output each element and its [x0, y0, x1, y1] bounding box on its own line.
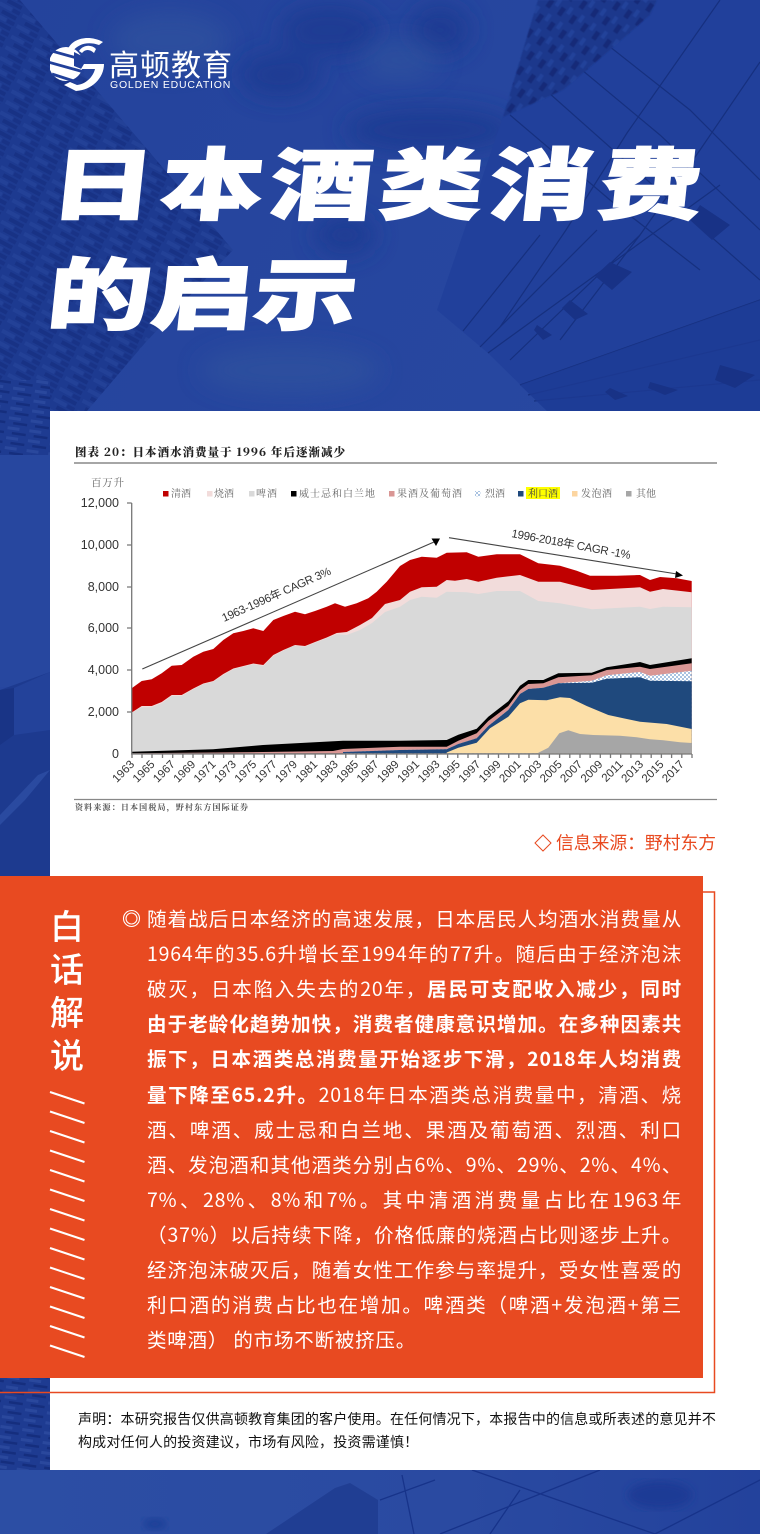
y axis labels: 10,000 — [81, 538, 119, 552]
x axis year labels: 1993 — [416, 759, 443, 785]
body text: 由于老龄化趋势加快，消费者健康意识增加。在多种因素共 — [147, 1008, 682, 1037]
body text: 1964年的35.6升增长至1994年的77升。随后由于经济泡沫 — [147, 938, 682, 967]
x axis year labels: 1963 — [111, 759, 137, 785]
body text: 酒、发泡酒和其他酒类分别占6%、9%、29%、2%、4%、 — [147, 1149, 682, 1178]
left building — [0, 0, 233, 455]
lower right darker facade — [520, 300, 760, 411]
x axis year labels: 1969 — [172, 759, 198, 785]
legend — [163, 485, 656, 500]
x axis year labels: 2007 — [558, 759, 585, 785]
x axis year labels: 1989 — [375, 759, 402, 785]
right building facade — [437, 0, 760, 411]
legend: 烈酒 — [485, 485, 505, 500]
x axis year labels: 1997 — [457, 759, 483, 785]
icon: globe logo mark — [50, 38, 104, 91]
x axis year labels: 1981 — [294, 759, 320, 785]
chart heading: 图表 20：日本酒水消费量于 1996 年后逐渐减少 — [75, 444, 346, 460]
legend: 利口酒 — [528, 485, 558, 500]
body text: 量下降至65.2升。2018年日本酒类总消费量中，清酒、烧 — [147, 1078, 682, 1108]
y axis labels: 6,000 — [88, 621, 119, 635]
x axis year labels: 1973 — [212, 759, 239, 785]
body text: 破灭，日本陷入失去的20年，居民可支配收入减少，同时 — [147, 973, 682, 1002]
logo: Golden Education — [50, 38, 233, 91]
title — [43, 124, 715, 346]
windows — [534, 205, 755, 400]
stacked areas — [132, 552, 692, 753]
x axis year labels: 1965 — [131, 759, 158, 785]
legend: 果酒及葡萄酒 — [397, 485, 462, 500]
y axis labels — [81, 496, 119, 761]
x axis year labels: 1967 — [151, 759, 178, 785]
legend: 威士忌和白兰地 — [299, 485, 375, 500]
x axis year labels: 2003 — [518, 759, 544, 785]
brand name Chinese: 高顿教育 — [109, 41, 233, 85]
body text: （37%）以后持续下降，价格低廉的烧酒占比则逐步上升。 — [147, 1219, 682, 1248]
x axis year labels: 1979 — [273, 759, 300, 785]
x axis year labels: 1983 — [314, 759, 341, 785]
body text: 利口酒的消费占比也在增加。啤酒类（啤酒+发泡酒+第三 — [147, 1289, 682, 1318]
x axis year labels: 1987 — [355, 759, 381, 785]
lower left building strip — [0, 1378, 50, 1470]
x axis year labels: 2015 — [640, 759, 667, 785]
x axis year labels — [111, 759, 687, 785]
disclaimer: 构成对任何人的投资建议，市场有风险，投资需谨慎！ — [78, 1432, 418, 1452]
label: decline CAGR: 1996-2018年 CAGR -1% — [510, 526, 632, 562]
body text: 酒、啤酒、威士忌和白兰地、果酒及葡萄酒、烈酒、利口 — [147, 1114, 682, 1143]
disclaimer: 声明：本研究报告仅供高顿教育集团的客户使用。在任何情况下，本报告中的信息或所表述的意见并不 — [78, 1409, 716, 1429]
vertical heading — [50, 900, 84, 1078]
panel: white card — [50, 411, 760, 1470]
x axis year labels: 2005 — [538, 759, 565, 785]
decorative slashes — [50, 1091, 85, 1358]
legend: 其他 — [636, 485, 656, 500]
title: 的启示 — [43, 234, 364, 346]
body text: 随着战后日本经济的高速发展，日本居民人均酒水消费量从 — [147, 903, 682, 932]
y axis labels: 8,000 — [88, 580, 119, 594]
y axis labels: 2,000 — [88, 705, 119, 719]
x axis year labels: 1991 — [396, 759, 422, 785]
chart: Japanese alcohol consumption stacked area — [74, 444, 717, 813]
body text: 7%、28%、8%和7%。其中清酒消费量占比在1963年 — [147, 1184, 682, 1213]
source credit — [534, 829, 716, 855]
vertical heading: 白 — [50, 900, 84, 949]
x axis year labels: 1975 — [233, 759, 259, 785]
decorative orange outline — [0, 891, 716, 1394]
body text: 类啤酒） 的市场不断被挤压。 — [147, 1324, 416, 1353]
axes — [127, 503, 692, 758]
title: 日本酒类消费 — [46, 124, 715, 236]
arrow: growth 1963-1996 — [142, 538, 440, 669]
x axis year labels: 1985 — [335, 759, 361, 785]
x axis year labels: 1977 — [253, 759, 280, 785]
legend: 烧酒 — [214, 485, 234, 500]
disclaimer — [78, 1409, 716, 1452]
brand name English: GOLDEN EDUCATION — [110, 79, 231, 91]
vertical heading: 解 — [50, 986, 84, 1035]
x axis year labels: 1971 — [192, 759, 219, 785]
y axis labels: 12,000 — [81, 496, 119, 510]
bottom sky band — [0, 1470, 760, 1534]
x axis year labels: 2013 — [620, 759, 646, 785]
body text — [147, 903, 682, 1353]
icon: diamond — [534, 834, 552, 852]
y axis labels: 4,000 — [88, 663, 119, 677]
chart source note: 资料来源：日本国税局，野村东方国际证券 — [75, 802, 248, 813]
x axis year labels: 2011 — [600, 759, 626, 785]
y axis labels: 0 — [112, 747, 119, 761]
x axis year labels: 2017 — [660, 759, 687, 785]
legend: 发泡酒 — [581, 485, 612, 500]
clouds — [240, 5, 515, 255]
x axis year labels: 2009 — [579, 759, 605, 785]
y axis unit: 百万升 — [91, 475, 124, 490]
body text: 经济泡沫破灭后，随着女性工作参与率提升，受女性喜爱的 — [147, 1254, 682, 1283]
x axis year labels: 1999 — [477, 759, 504, 785]
source text: 信息来源：野村东方 — [556, 829, 716, 855]
upper right textured tower — [503, 0, 657, 117]
legend: 清酒 — [171, 485, 191, 500]
arrow: decline 1996-2018 — [449, 538, 683, 578]
icon: bullet circle — [122, 910, 140, 927]
x axis year labels: 1995 — [436, 759, 463, 785]
x axis year labels: 2001 — [497, 759, 524, 785]
body text: 振下，日本酒类总消费量开始逐步下滑，2018年人均消费 — [147, 1043, 682, 1072]
legend: 啤酒 — [256, 485, 277, 500]
panel: plain-language explanation — [0, 876, 703, 1378]
label: growth CAGR: 1963-1996年 CAGR 3% — [220, 564, 333, 625]
vertical heading: 话 — [50, 943, 84, 992]
vertical heading: 说 — [50, 1029, 84, 1078]
